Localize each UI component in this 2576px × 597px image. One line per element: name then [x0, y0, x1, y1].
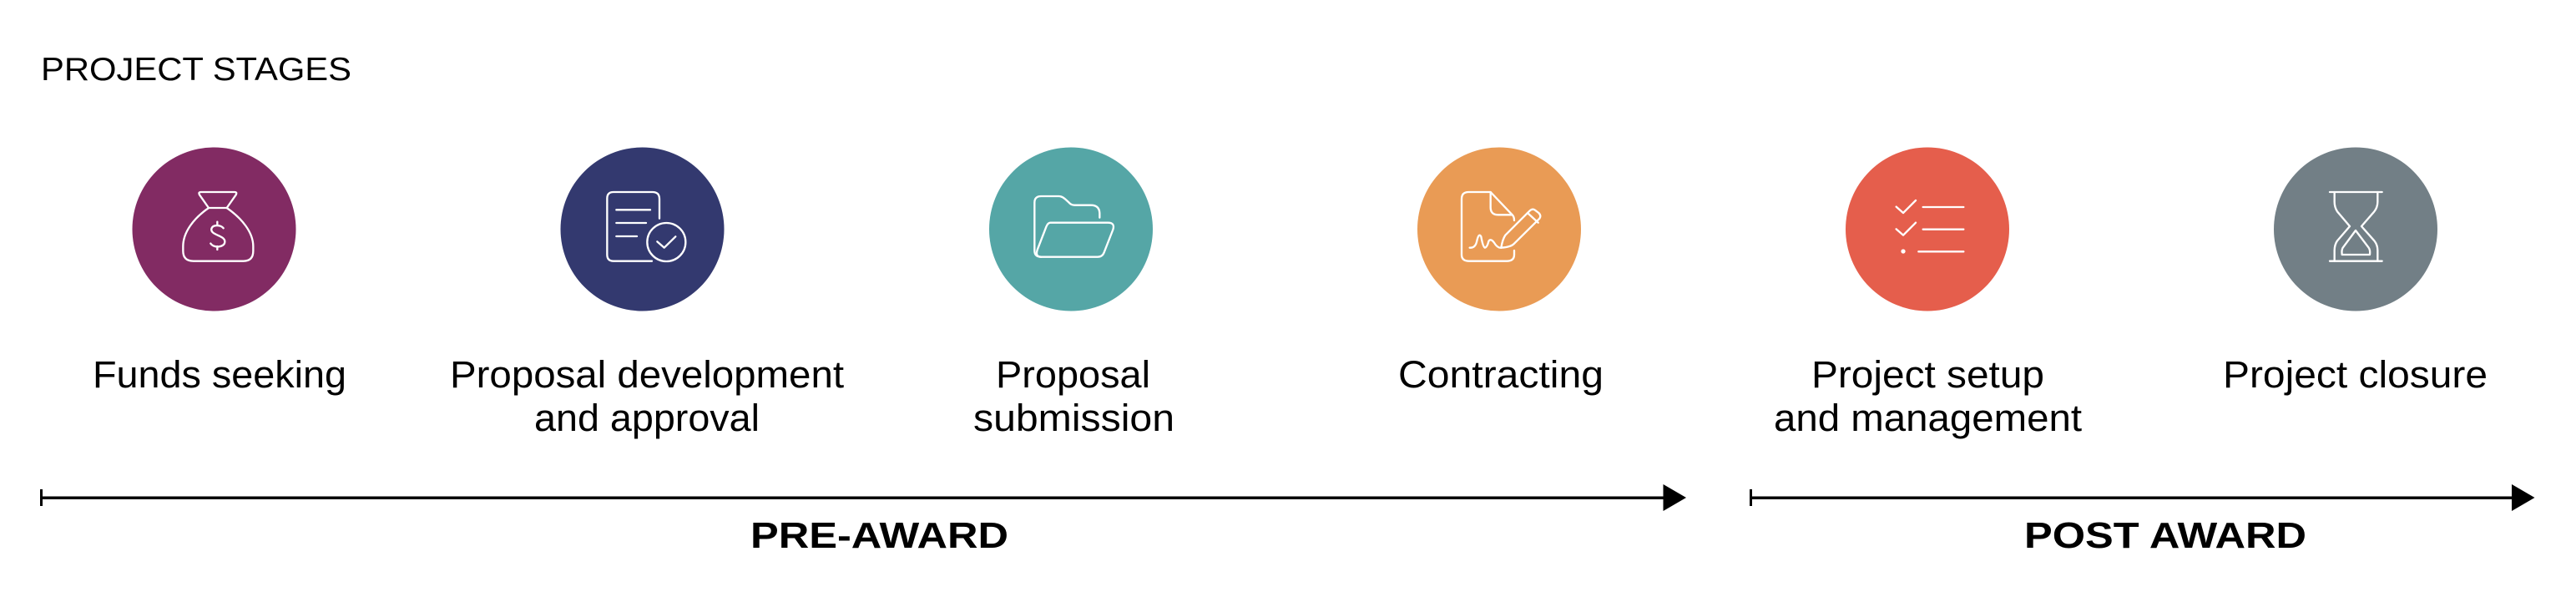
icon: open folder — [1034, 196, 1114, 257]
label: proposal submission: Proposal — [996, 353, 1150, 396]
title: PROJECT STAGES — [41, 52, 351, 88]
heading: post award: POST AWARD — [2024, 515, 2306, 556]
stage: funds seeking — [93, 147, 346, 396]
label: contracting: Contracting — [1398, 353, 1604, 396]
icon: checklist — [1897, 200, 1963, 254]
heading: pre-award: PRE-AWARD — [750, 515, 1008, 556]
circle: contracting — [1417, 147, 1581, 311]
label: funds seeking: Funds seeking — [93, 353, 346, 396]
circle: funds seeking — [132, 147, 295, 311]
label: project setup and management: Project setup — [1811, 353, 2044, 396]
label: project setup and management: and management — [1774, 397, 2083, 439]
circle: proposal development — [561, 147, 725, 311]
icon: money bag — [183, 192, 253, 261]
stage: project setup and management — [1774, 147, 2083, 439]
icon: hourglass — [2330, 192, 2382, 261]
label: proposal submission — [973, 353, 1174, 439]
circle: project closure — [2274, 147, 2437, 311]
arrow: post award timeline — [1750, 484, 2534, 511]
icon: signed document with pencil — [1462, 192, 1540, 261]
circle: project setup — [1846, 147, 2009, 311]
stage: proposal development and approval — [450, 147, 845, 439]
label: proposal submission: submission — [973, 397, 1174, 439]
label: proposal development and approval — [450, 353, 845, 439]
label: proposal development and approval: and approval — [534, 397, 760, 439]
label: project setup and management — [1774, 353, 2083, 439]
icon: document with check — [607, 192, 685, 261]
label: project closure: Project closure — [2223, 353, 2488, 396]
stage: proposal submission — [973, 147, 1174, 439]
arrow: pre-award timeline — [40, 484, 1686, 511]
stage: contracting — [1398, 147, 1604, 396]
label: proposal development and approval: Proposal development — [450, 353, 845, 396]
stage: project closure — [2223, 147, 2488, 396]
circle: proposal submission — [989, 147, 1153, 311]
